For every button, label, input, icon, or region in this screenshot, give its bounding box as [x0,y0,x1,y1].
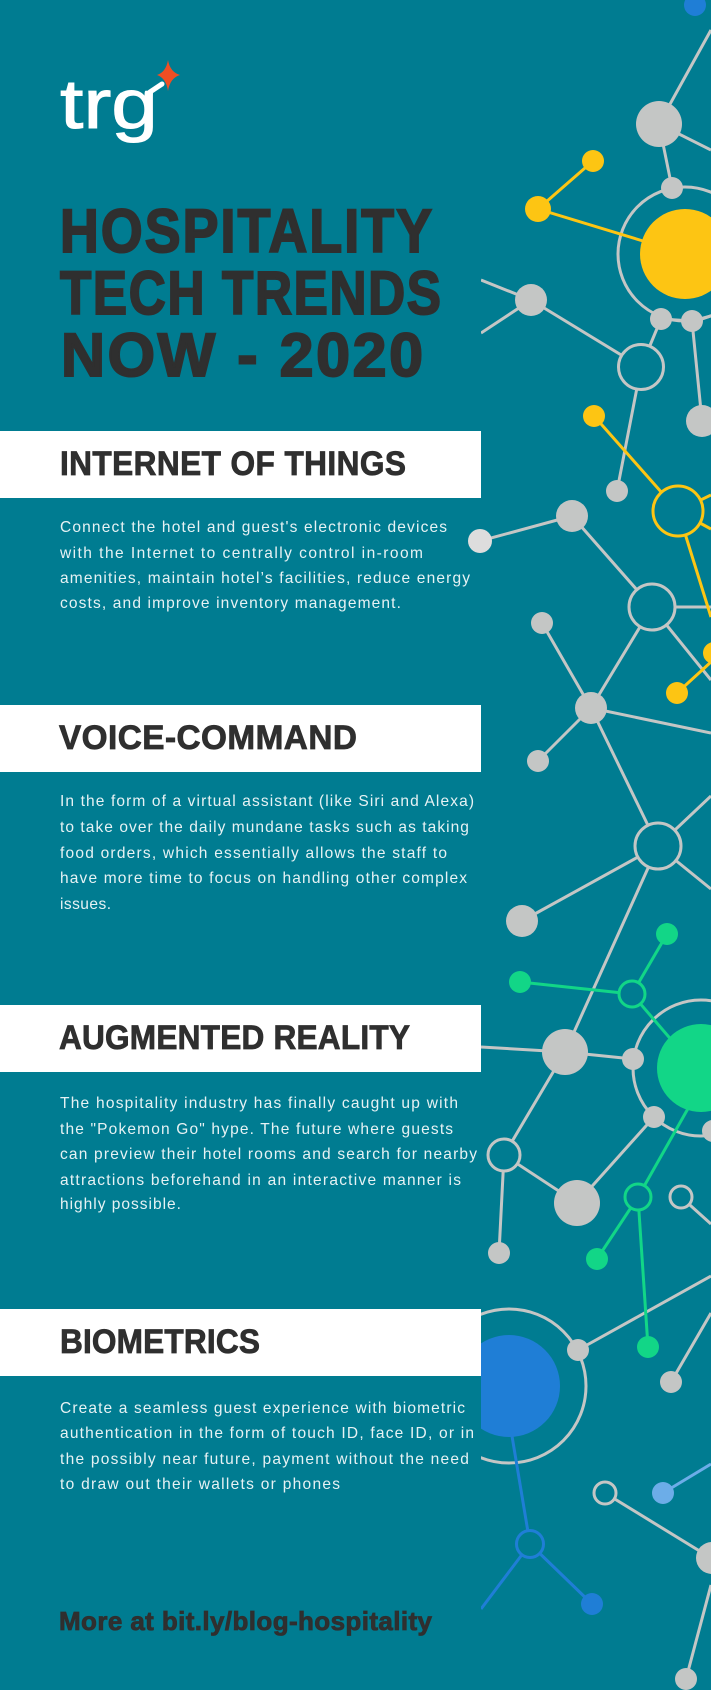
title: NOW - 2020 [61,321,423,389]
panel: voice-command [0,705,481,913]
text block [60,1095,477,1213]
network graphic: yellow cluster [525,150,711,704]
title: TECH TRENDS [60,259,441,327]
text block: The hospitality industry has finally caught up with [60,1095,458,1112]
text block: with the Internet to centrally control in-room [59,545,423,562]
text block: issues. [60,896,111,913]
text block: the "Pokemon Go" hype. The future where guests [60,1121,453,1138]
text block [59,519,470,612]
title [60,198,441,389]
heading band: BIOMETRICS [60,1322,260,1360]
logo: trg with red star: trg [60,65,158,143]
text block: amenities, maintain hotel’s facilities, reduce energy [60,570,470,587]
heading band: INTERNET OF THINGS [60,444,406,482]
text block [60,793,474,913]
heading band: AUGMENTED REALITY [59,1018,410,1056]
text block: Connect the hotel and guest's electronic devices [60,519,447,536]
network graphic: green cluster [509,923,711,1358]
text block: highly possible. [60,1196,181,1213]
footer link text: More at bit.ly/blog-hospitality [59,1606,433,1636]
text block: food orders, which essentially allows the staff to [60,845,447,862]
heading band: VOICE-COMMAND [59,720,357,757]
text block: to draw out their wallets or phones [60,1476,340,1493]
network graphic: gray links and nodes [481,29,711,1690]
text block [60,1400,474,1493]
heading band [0,705,481,772]
text block: authentication in the form of touch ID, face ID, or in [60,1425,474,1442]
text block: to take over the daily mundane tasks such as taking [60,819,469,836]
heading band [0,431,481,498]
text block: attractions beforehand in an interactive manner is [60,1172,461,1189]
title: HOSPITALITY [60,198,432,266]
text block: the possibly near future, payment without the need [60,1451,469,1468]
network graphic: blue cluster [458,0,711,1615]
network node: light gray end node [468,529,492,553]
logo: trg with red star [60,60,180,143]
text block: costs, and improve inventory management. [60,595,401,612]
text block: have more time to focus on handling other complex [60,870,467,887]
heading band [0,1309,481,1376]
text block: In the form of a virtual assistant (like Siri and Alexa) [60,793,474,810]
text block: can preview their hotel rooms and search for nearby [60,1146,477,1163]
text block: Create a seamless guest experience with biometric [60,1400,465,1417]
heading band [0,1005,481,1072]
panel: internet of things [0,431,481,612]
panel: augmented reality [0,1005,481,1213]
panel: biometrics [0,1309,481,1493]
